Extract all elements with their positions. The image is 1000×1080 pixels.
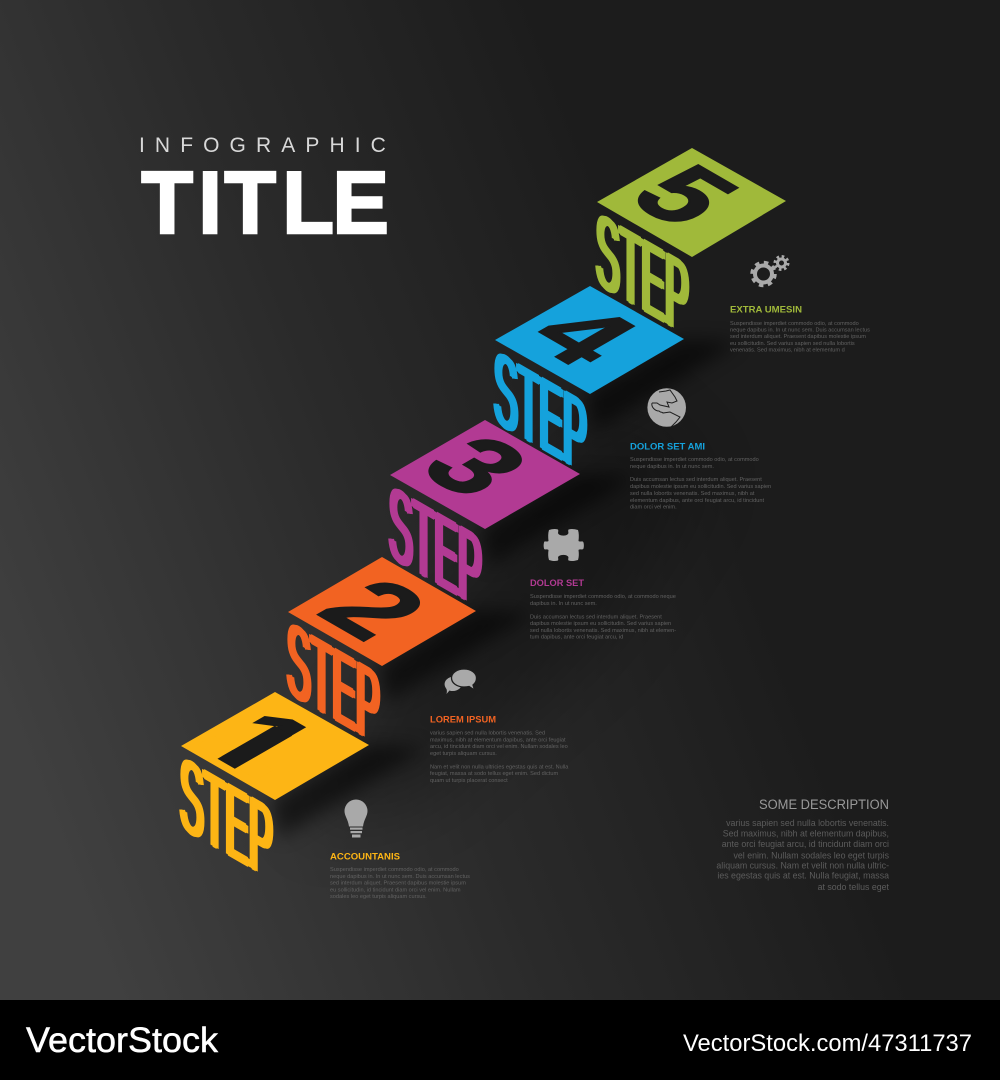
text block: dolor set ami: sed nulla lobortis venenatis. Sed maximus, nibh at xyxy=(630,491,755,497)
step 2 label: STEP xyxy=(287,599,380,767)
text block: dolor set ami: DOLOR SET AMI xyxy=(630,442,705,452)
text block: extra umesin: sed interdum aliquet. Praesent dapibus molestie ipsum xyxy=(730,334,866,340)
title: TITLE xyxy=(141,154,389,252)
icon: light bulb xyxy=(344,800,368,838)
step 5 label: STEP xyxy=(596,190,689,358)
text block: lorem ipsum: feugiat, massa at sodo tellus eget enim. Sed dictum xyxy=(430,771,558,777)
text block: some description xyxy=(716,797,890,892)
text block: accountanis: Suspendisse imperdiet commodo odio, at commodo xyxy=(330,867,459,873)
text block: some description: at sodo tellus eget xyxy=(818,882,890,892)
text block: accountanis: neque dapibus in. In ut nunc sem. Duis accumsan lectus xyxy=(330,874,470,880)
text block: extra umesin: neque dapibus in. In ut nunc sem. Duis accumsan lectus xyxy=(730,328,870,334)
icon: puzzle piece xyxy=(544,529,584,561)
text block: some description: varius sapien sed nulla lobortis venenatis. xyxy=(726,818,889,828)
text block: dolor set: sed nulla lobortis venenatis. Sed maximus, nibh at elemen- xyxy=(530,628,676,634)
footer bar: VectorStock xyxy=(26,1021,219,1060)
icon: gears xyxy=(752,256,788,286)
text block: lorem ipsum: maximus, nibh at elementum dapibus, ante orci feugiat xyxy=(430,738,566,744)
step 1 tile: 1 xyxy=(183,695,342,787)
text block: accountanis xyxy=(330,852,470,900)
step 2 tile: 2 xyxy=(294,563,453,655)
text block: lorem ipsum: arcu, id tincidunt diam orci vel enim. Nullam sodales leo xyxy=(430,744,568,750)
text block: dolor set xyxy=(530,578,676,640)
text block: some description: Sed maximus, nibh at elementum dapibus, xyxy=(723,828,889,838)
text block: dolor set: tum dapibus, ante orci feugiat arcu, id xyxy=(530,634,623,640)
text block: some description: ies egestas quis at est. Nulla feugiat, massa xyxy=(717,870,889,880)
text block: lorem ipsum: LOREM IPSUM xyxy=(430,714,496,726)
text block: accountanis: sodales leo eget turpis aliquam cursus. xyxy=(330,894,427,900)
text block: dolor set ami: Duis accumsan lectus sed interdum aliquet. Praesent xyxy=(630,477,762,483)
text block: lorem ipsum: varius sapien sed nulla lobortis venenatis. Sed xyxy=(430,730,545,736)
text block: dolor set: dapibus molestie ipsum eu sollicitudin. Sed varius sapien xyxy=(530,621,671,627)
step 1 label: STEP xyxy=(180,734,273,902)
footer bar: VectorStock.com/47311737 xyxy=(683,1030,972,1057)
icon: globe xyxy=(647,388,686,427)
text block: lorem ipsum: Nam et velit non nulla ultricies egestas quis at est. Nulla xyxy=(430,764,569,770)
text block: dolor set: dapibus in. In ut nunc sem. xyxy=(530,601,597,607)
title: INFOGRAPHIC xyxy=(139,134,396,157)
text block: dolor set ami xyxy=(630,442,771,510)
text block: some description: vel enim. Nullam sodales leo eget turpis xyxy=(734,850,890,860)
text block: extra umesin: EXTRA UMESIN xyxy=(730,304,802,316)
step 4 label: STEP xyxy=(494,328,587,496)
step 4 tile: 4 xyxy=(504,289,663,381)
icon: speech bubbles xyxy=(445,669,476,694)
text block: some description: ante orci feugiat arcu, id tincidunt diam orci xyxy=(722,839,889,849)
text block: dolor set: Duis accumsan lectus sed interdum aliquet. Praesent xyxy=(530,614,662,620)
text block: dolor set ami: diam orci vel enim. xyxy=(630,504,677,510)
step 5 tile: 5 xyxy=(605,149,764,241)
text block: lorem ipsum: eget turpis aliquam cursus. xyxy=(430,751,497,757)
step 3 label: STEP xyxy=(389,463,482,631)
text block: accountanis: sed interdum aliquet. Praesent dapibus molestie ipsum xyxy=(330,880,466,886)
text block: accountanis: ACCOUNTANIS xyxy=(330,852,401,862)
footer bar xyxy=(0,1000,1000,1080)
text block: extra umesin: eu sollicitudin. Sed varius sapien sed nulla lobortis xyxy=(730,341,855,347)
text block: lorem ipsum xyxy=(430,714,569,784)
text block: dolor set: DOLOR SET xyxy=(530,578,584,589)
text block: lorem ipsum: quam ut turpis placerat consect xyxy=(430,778,508,784)
text block: dolor set ami: elementum dapibus, ante orci feugiat arcu, id tincidunt xyxy=(630,498,764,504)
text block: extra umesin xyxy=(730,304,870,354)
ambient shadow xyxy=(300,400,700,830)
text block: dolor set ami: dapibus molestie ipsum eu sollicitudin. Sed varius sapien xyxy=(630,484,771,490)
text block: extra umesin: venenatis. Sed maximus, nibh at elementum d xyxy=(730,348,845,354)
text block: extra umesin: Suspendisse imperdiet commodo odio, at commodo xyxy=(730,321,859,327)
text block: dolor set: Suspendisse imperdiet commodo odio, at commodo neque xyxy=(530,594,676,600)
text block: some description: aliquam cursus. Nam et velit non nulla ultric- xyxy=(716,860,889,870)
text block: accountanis: eu sollicitudin, id tincidunt diam orci vel enim. Nullam xyxy=(330,888,461,894)
text block: dolor set ami: Suspendisse imperdiet commodo odio, at commodo xyxy=(630,457,759,463)
stair shadows xyxy=(272,339,739,838)
text block: some description: SOME DESCRIPTION xyxy=(759,797,889,812)
step 3 tile: 3 xyxy=(396,420,555,512)
text block: dolor set ami: neque dapibus in. In ut nunc sem. xyxy=(630,464,714,470)
